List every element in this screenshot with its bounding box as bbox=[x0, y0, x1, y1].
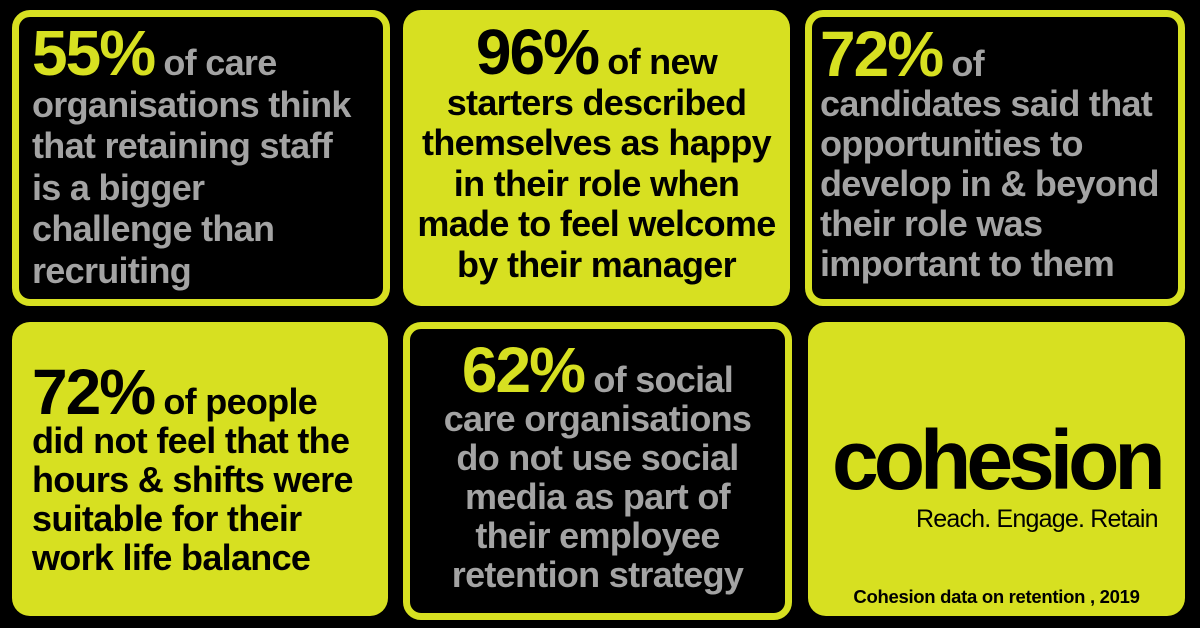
stat text 62%: media as part of bbox=[465, 476, 730, 517]
stat text 72% hours: suitable for their bbox=[32, 498, 301, 539]
stat text 72% hours: hours & shifts were bbox=[32, 459, 353, 500]
stat text 96% bbox=[417, 16, 776, 284]
stat text 96%: themselves as happy bbox=[422, 122, 771, 163]
stat text 72% development: their role was bbox=[820, 203, 1042, 244]
stat text 55%: 55% of care bbox=[32, 17, 277, 89]
stat text 72% hours: 72% of people bbox=[32, 356, 317, 428]
source footer: Cohesion data on retention , 2019 bbox=[853, 586, 1140, 607]
panel: 96% new starters bbox=[403, 10, 790, 306]
stat text 55%: is a bigger bbox=[32, 166, 204, 208]
stat text 62%: care organisations bbox=[444, 398, 751, 439]
tagline: Reach. Engage. Retain bbox=[916, 505, 1158, 533]
stat text 72% hours bbox=[32, 356, 353, 578]
stat text 72% development: important to them bbox=[820, 243, 1114, 284]
stat text 55% bbox=[32, 17, 352, 290]
stat text 55%: that retaining staff bbox=[32, 125, 332, 166]
stat text 62% bbox=[444, 334, 751, 595]
stat text 72% development: 72% of bbox=[820, 18, 984, 90]
stat text 62%: retention strategy bbox=[452, 554, 743, 595]
stat text 72% development bbox=[820, 18, 1159, 284]
stat text 62%: do not use social bbox=[456, 437, 739, 478]
stat text 96%: in their role when bbox=[454, 162, 739, 204]
stat text 72% development: opportunities to bbox=[820, 123, 1083, 164]
stat text 72% development: develop in & beyond bbox=[820, 163, 1159, 204]
stat text 55%: challenge than bbox=[32, 208, 274, 249]
panel: 55% retaining bbox=[12, 10, 390, 306]
stat text 55%: recruiting bbox=[32, 250, 191, 290]
stat text 96%: starters described bbox=[447, 82, 746, 122]
stat text 55%: organisations think bbox=[32, 84, 351, 124]
stat text 96%: 96% of new bbox=[476, 16, 717, 88]
logo wordmark: cohesion bbox=[832, 413, 1161, 507]
stat text 96%: by their manager bbox=[457, 244, 736, 284]
stat text 72% development: candidates said that bbox=[820, 83, 1152, 124]
panel: 72% hours bbox=[12, 322, 388, 616]
panel: cohesion logo bbox=[808, 322, 1185, 616]
panel: 62% social media bbox=[403, 322, 792, 620]
stat text 72% hours: did not feel that the bbox=[32, 420, 349, 461]
panel: 72% candidates bbox=[805, 10, 1185, 306]
stat text 72% hours: work life balance bbox=[32, 537, 310, 578]
stat text 96%: made to feel welcome bbox=[417, 203, 776, 244]
stat text 62%: their employee bbox=[475, 515, 720, 556]
stat text 62%: 62% of social bbox=[462, 334, 733, 406]
